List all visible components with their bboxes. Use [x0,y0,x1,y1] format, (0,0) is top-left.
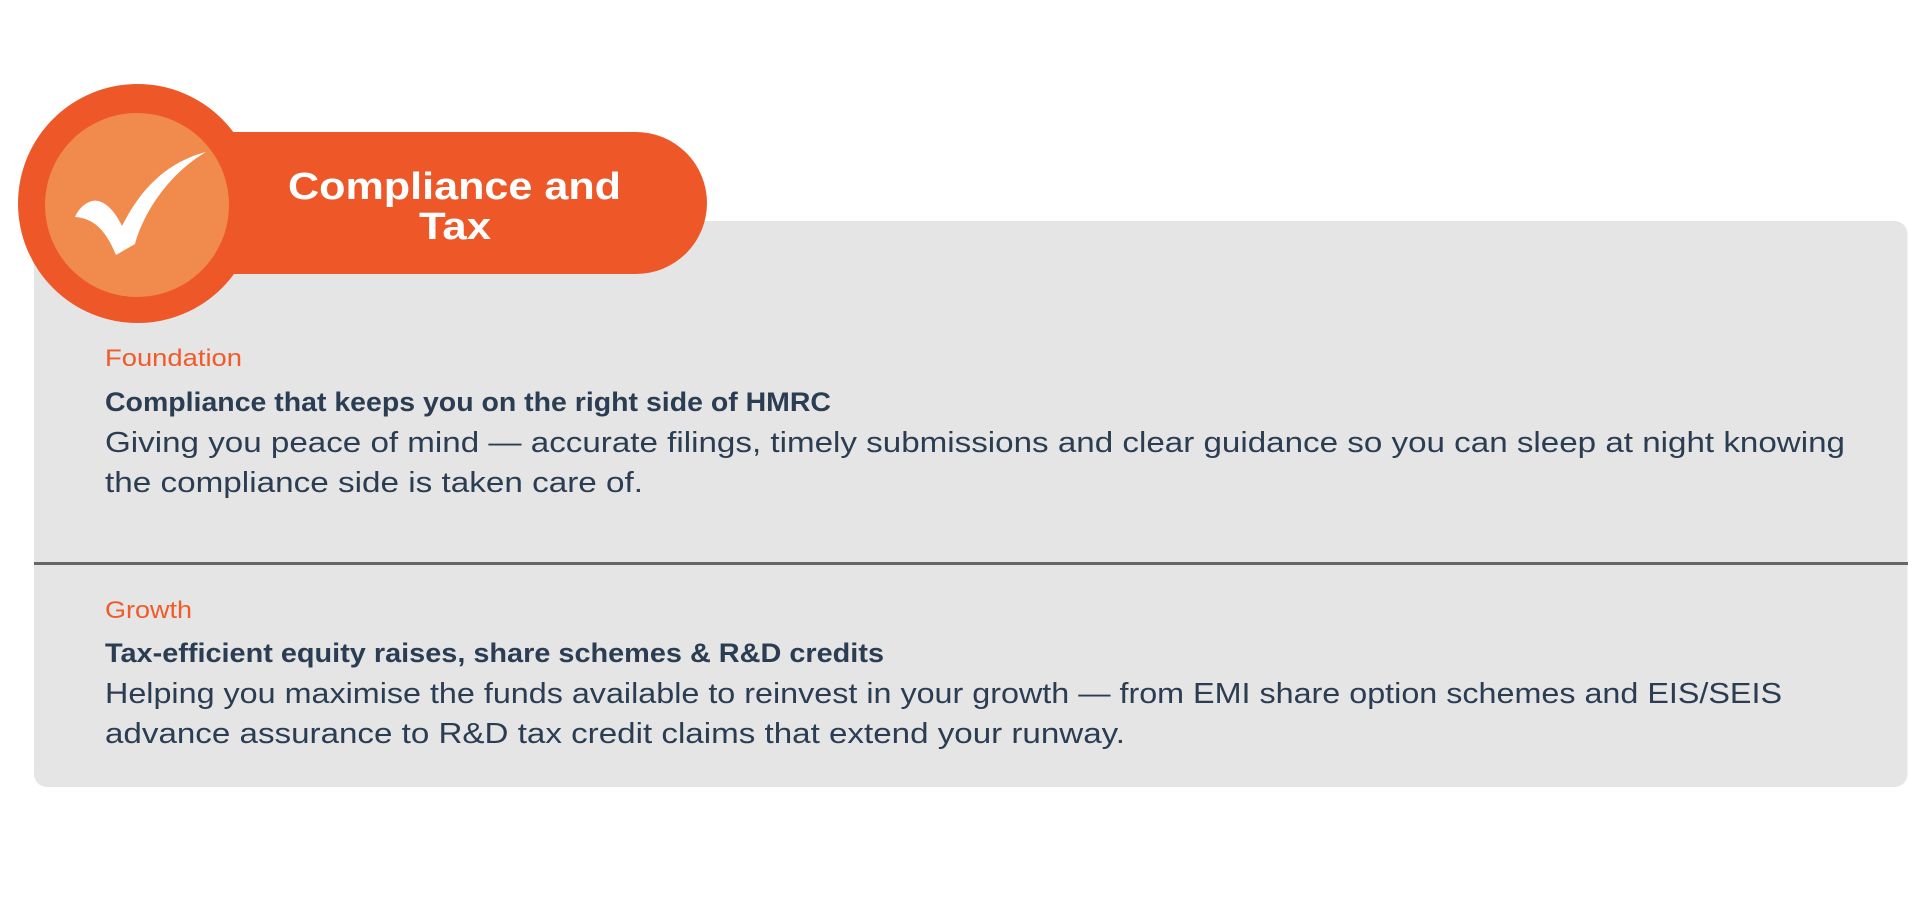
heading: growth: Tax-efficient equity raises, share schemes & R&D credits [105,638,884,668]
text block: foundation description: Giving you peace of mind — accurate filings, timely submissions and clear guidance so you can sleep at night knowing [105,427,1845,459]
label: Growth: Growth [105,597,192,624]
panel: content card [34,221,1908,787]
text block: foundation description [105,427,1845,499]
text block: growth description [105,678,1782,750]
text block: growth description: Helping you maximise the funds available to reinvest in your growth — from EMI share option schemes and EIS/SEIS [105,678,1782,710]
title: Tax [419,206,491,248]
label: Foundation: Foundation [105,345,242,372]
heading: foundation: Compliance that keeps you on the right side of HMRC [105,387,831,417]
title: Compliance and [288,166,621,208]
text block: growth description: advance assurance to R&D tax credit claims that extend your runway. [105,718,1125,750]
title [288,166,621,248]
section: growth [105,597,1782,750]
section: foundation [105,345,1845,499]
header badge [18,84,707,323]
icon: circle with check mark [18,84,257,323]
pill banner [200,132,707,274]
text block: foundation description: the compliance side is taken care of. [105,467,643,499]
